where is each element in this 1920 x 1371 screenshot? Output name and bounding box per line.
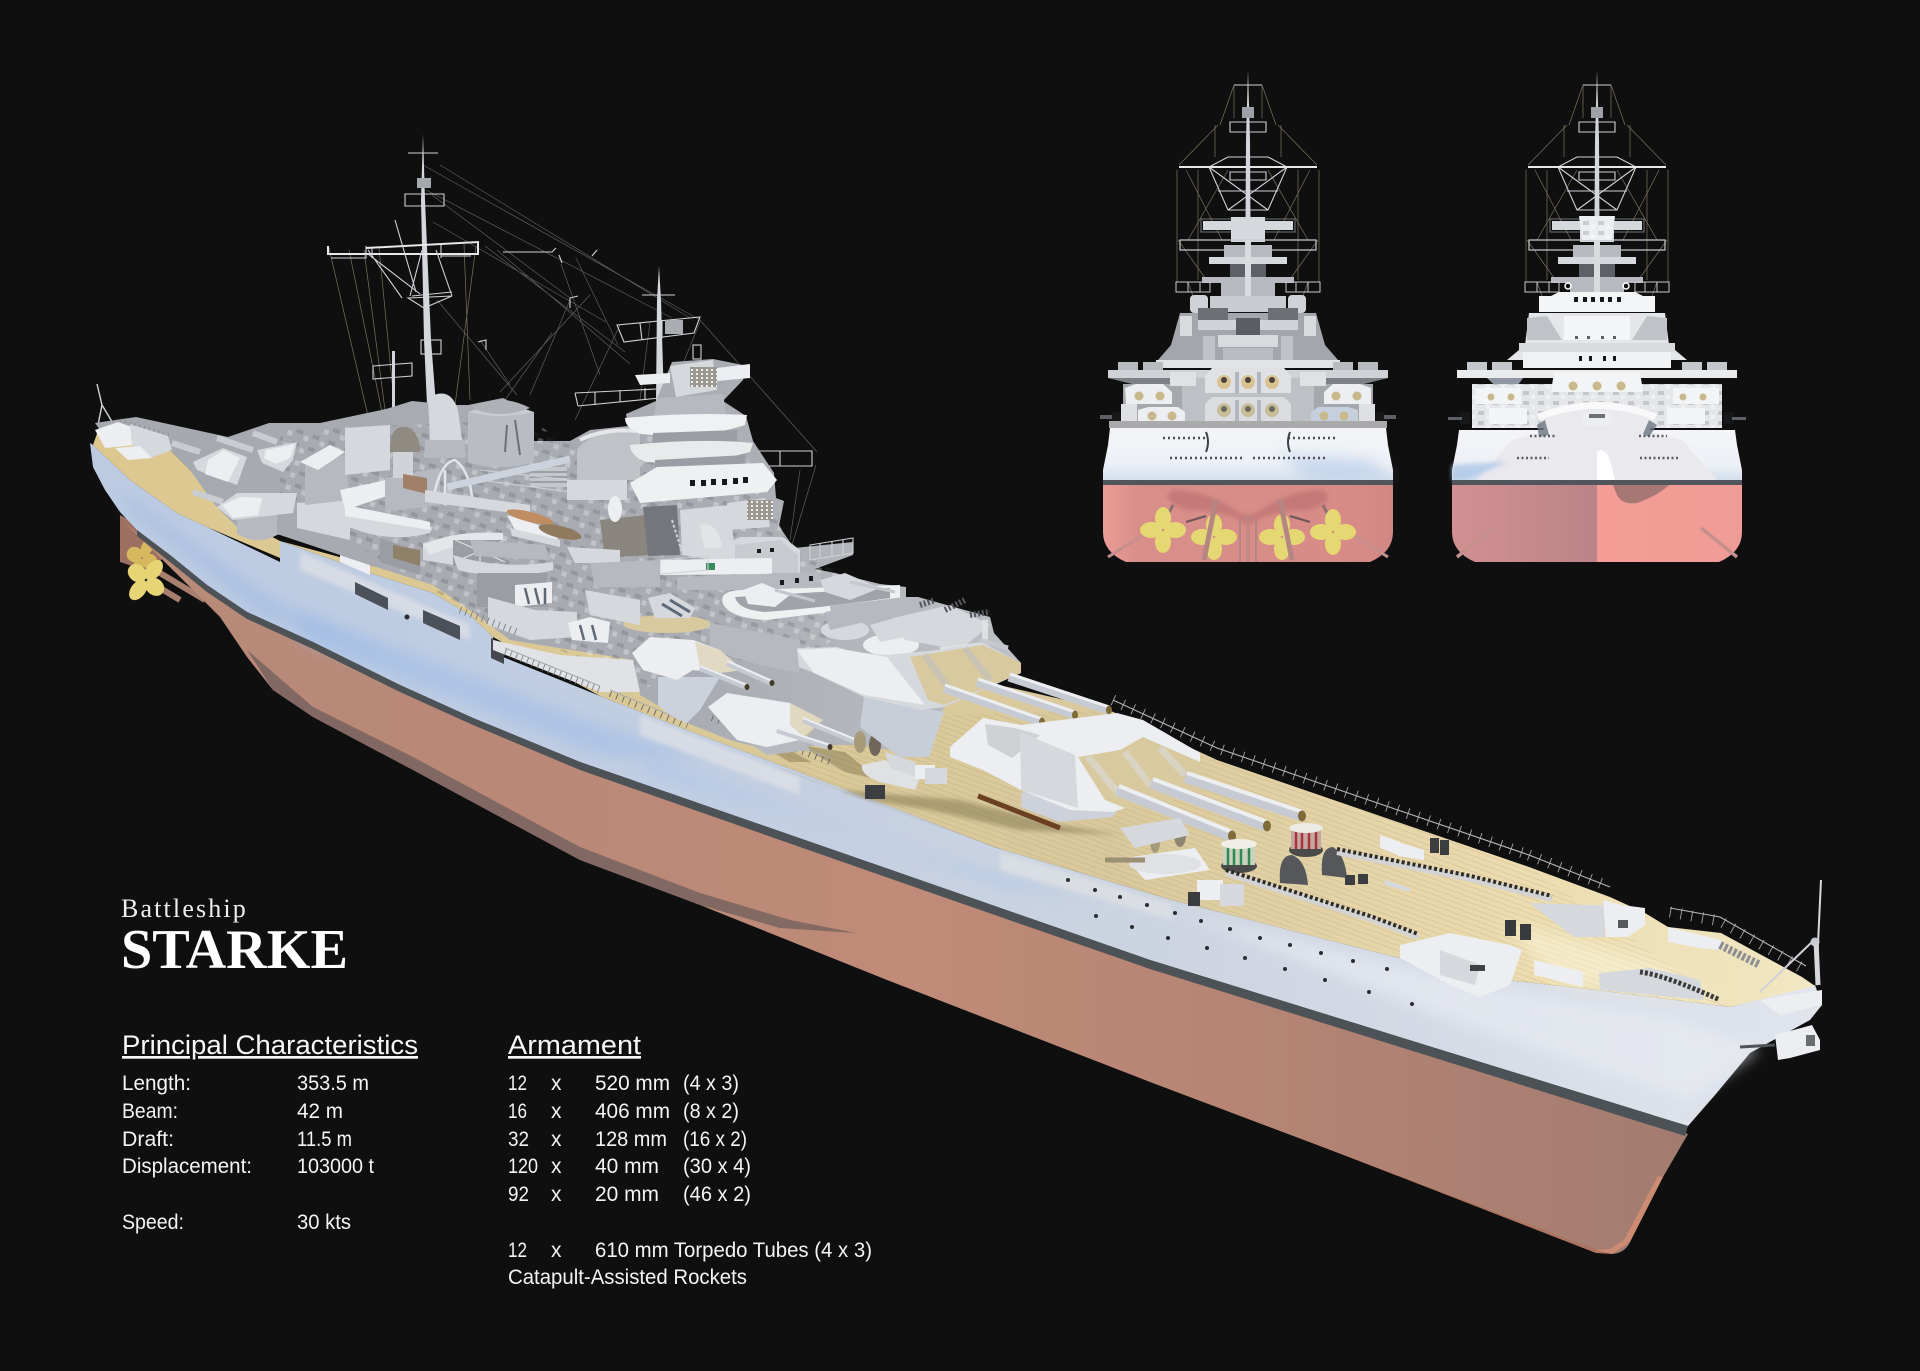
principal characteristics: Displacement: bbox=[122, 1155, 252, 1178]
armament: 406 mm bbox=[595, 1100, 670, 1123]
midship boats and crane bbox=[403, 460, 570, 515]
bow hull bbox=[1452, 430, 1742, 480]
portholes bbox=[1066, 878, 1414, 1006]
turret A bbox=[950, 713, 1306, 842]
title block: STARKE bbox=[121, 919, 348, 981]
title block: Battleship bbox=[121, 894, 247, 923]
aft mast bbox=[373, 351, 412, 411]
turret B bbox=[797, 643, 1112, 757]
armament: 40 mm bbox=[595, 1155, 659, 1178]
armament: 92 bbox=[508, 1183, 529, 1206]
lower hull shading bbox=[247, 650, 1663, 1254]
strut over inner propellers bbox=[1204, 500, 1292, 560]
principal characteristics: Speed: bbox=[122, 1211, 184, 1234]
catapult beam bbox=[447, 459, 570, 487]
aft turrets bbox=[172, 433, 297, 540]
main mast bbox=[328, 134, 478, 405]
stern AA cluster bbox=[95, 420, 172, 460]
turret C bbox=[632, 637, 774, 723]
armament: 120 bbox=[508, 1155, 538, 1178]
midship aft blocks bbox=[297, 425, 505, 575]
bow deck fittings bbox=[1534, 927, 1822, 1015]
armament: 12 bbox=[508, 1072, 527, 1095]
bow superstructure bbox=[1448, 70, 1746, 562]
principal characteristics: 42 m bbox=[297, 1100, 343, 1123]
mid tower cavity bbox=[600, 496, 735, 560]
bow turrets bbox=[1475, 372, 1719, 424]
deck fittings amidships bbox=[862, 752, 1060, 828]
jackstaff bbox=[1760, 880, 1821, 992]
midship platforms and boats bbox=[453, 506, 830, 762]
stern propellers bbox=[1140, 507, 1356, 560]
armament: 128 mm bbox=[595, 1128, 667, 1151]
armament: 32 bbox=[508, 1128, 529, 1151]
stern underwater shading bbox=[1168, 490, 1328, 525]
stern shafts and struts bbox=[1108, 505, 1388, 562]
armament: x bbox=[551, 1072, 562, 1095]
bow anchor fairlead bbox=[1581, 410, 1613, 426]
stern main turrets bbox=[1205, 368, 1291, 421]
bow bilge keels bbox=[1457, 528, 1737, 557]
fore breakwaters and hawse bbox=[1400, 900, 1645, 997]
bitts and boxes bbox=[1345, 835, 1531, 940]
armament: Armament bbox=[508, 1030, 642, 1060]
armament: x bbox=[551, 1155, 562, 1178]
armament: x bbox=[551, 1100, 562, 1123]
forward AA mounts bbox=[821, 600, 1008, 656]
superstructure mass bbox=[95, 359, 1021, 757]
forward dome bbox=[567, 430, 640, 500]
principal characteristics: Draft: bbox=[122, 1128, 174, 1151]
principal characteristics bbox=[122, 1030, 418, 1234]
vents bbox=[1280, 847, 1347, 885]
armament: x bbox=[551, 1239, 562, 1262]
wooden deck bbox=[93, 425, 1815, 1007]
principal characteristics: 353.5 m bbox=[297, 1072, 369, 1095]
bow view bbox=[1448, 70, 1746, 562]
armament: (46 x 2) bbox=[683, 1183, 751, 1206]
hull light bands bbox=[120, 490, 1760, 1100]
armament: (4 x 3) bbox=[683, 1072, 739, 1095]
stern side turrets bbox=[1125, 384, 1371, 424]
railing top line bbox=[1113, 700, 1806, 966]
armament: Catapult-Assisted Rockets bbox=[508, 1266, 747, 1289]
rigging wires bbox=[329, 165, 817, 545]
deck winches bbox=[1105, 818, 1244, 906]
stern hull bbox=[1103, 428, 1393, 480]
armament: 20 mm bbox=[595, 1183, 659, 1206]
stern superstructure bbox=[1100, 70, 1396, 562]
main ship perspective view bbox=[90, 134, 1822, 1254]
armament bbox=[508, 1030, 872, 1289]
armament: 12 bbox=[508, 1239, 527, 1262]
capstans bbox=[1221, 823, 1323, 873]
armament: (16 x 2) bbox=[683, 1128, 747, 1151]
principal characteristics: Length: bbox=[122, 1072, 191, 1095]
forward mast bbox=[575, 266, 812, 466]
stern view bbox=[1100, 70, 1396, 562]
principal characteristics: 11.5 m bbox=[297, 1128, 352, 1151]
twin gun platform bbox=[722, 573, 905, 640]
armament: 520 mm bbox=[595, 1072, 670, 1095]
armament: (30 x 4) bbox=[683, 1155, 751, 1178]
armament: 610 mm Torpedo Tubes (4 x 3) bbox=[595, 1239, 872, 1262]
bow anchor bbox=[1740, 1025, 1820, 1060]
armament: (8 x 2) bbox=[683, 1100, 739, 1123]
propeller and rudder bbox=[114, 515, 205, 612]
boot topping stripe bbox=[137, 530, 1688, 1136]
principal characteristics: Principal Characteristics bbox=[122, 1030, 418, 1060]
principal characteristics: 30 kts bbox=[297, 1211, 351, 1234]
aft director dome bbox=[390, 394, 465, 478]
bow shadow bbox=[1613, 485, 1669, 503]
upper hull bbox=[90, 443, 1822, 1126]
secondary hull openings bbox=[355, 582, 504, 664]
turret D bbox=[708, 693, 881, 756]
stern flagstaff bbox=[97, 384, 114, 425]
lower hull bbox=[122, 520, 1688, 1254]
anchor chains bbox=[1226, 849, 1552, 937]
far-side railing bbox=[1113, 700, 1802, 968]
tower tiers bbox=[625, 360, 853, 590]
principal characteristics: Beam: bbox=[122, 1100, 178, 1123]
armament: 16 bbox=[508, 1100, 527, 1123]
funnel bbox=[468, 400, 534, 467]
armament: x bbox=[551, 1183, 562, 1206]
armament: x bbox=[551, 1128, 562, 1151]
principal characteristics: 103000 t bbox=[297, 1155, 374, 1178]
